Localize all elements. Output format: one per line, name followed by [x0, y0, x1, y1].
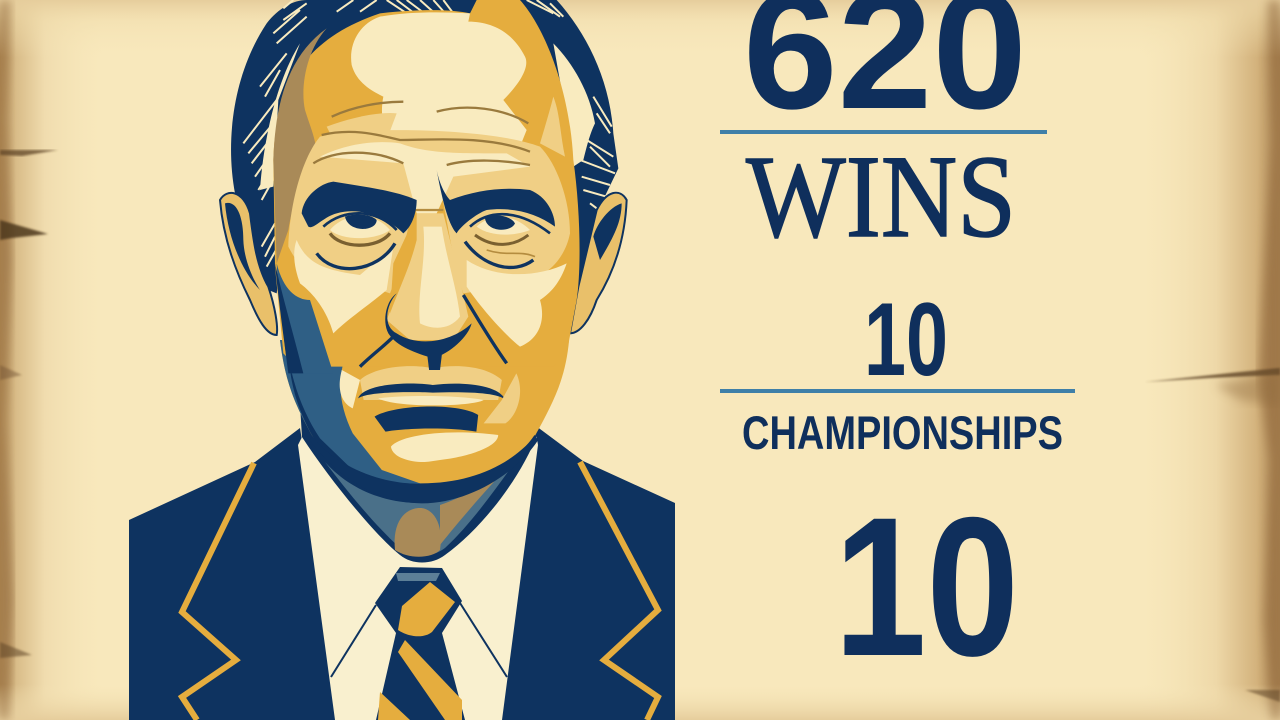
left face shadow: [277, 263, 333, 373]
label WINS: WINS: [746, 131, 1016, 262]
upper lip: [360, 366, 502, 400]
tie: [331, 567, 507, 720]
nose: [387, 213, 468, 340]
lower lip: [378, 396, 484, 405]
number 10: 10: [864, 282, 948, 398]
brow band: [288, 130, 570, 293]
left brow: [302, 182, 417, 233]
hair highlights: [243, 0, 615, 267]
stat: 620 wins: [720, 0, 1047, 262]
left eye: [317, 213, 397, 269]
forehead highlight: [351, 12, 527, 147]
face base: [273, 0, 580, 367]
forehead wrinkles: [313, 102, 530, 165]
hair: [231, 0, 618, 293]
shirt: [298, 433, 538, 720]
lapel gold trim left: [182, 463, 254, 720]
chin highlight: [391, 432, 498, 462]
head: [220, 0, 627, 373]
portrait illustration: [129, 0, 675, 720]
mouth and chin: [340, 355, 520, 462]
right temple highlight: [540, 97, 565, 157]
right eye: [465, 214, 550, 267]
lapel gold trim right: [580, 462, 658, 720]
left ear: [220, 193, 277, 335]
nostrils: [385, 293, 472, 358]
mouth line: [358, 384, 505, 400]
right ear: [570, 193, 627, 333]
cheek highlights: [294, 240, 393, 333]
right brow: [437, 170, 555, 233]
stat: 10 championships: [720, 282, 1075, 459]
lip shadow: [375, 406, 478, 432]
suit jacket: [129, 426, 675, 720]
collar lines: [331, 603, 507, 677]
jaw: [280, 340, 569, 503]
forehead shadow: [273, 28, 327, 263]
divider: [720, 389, 1075, 393]
neck: [300, 400, 540, 562]
divider: [720, 130, 1047, 134]
stat: bottom 10: 10: [834, 476, 1019, 697]
label CHAMPIONSHIPS: CHAMPIONSHIPS: [742, 406, 1063, 459]
